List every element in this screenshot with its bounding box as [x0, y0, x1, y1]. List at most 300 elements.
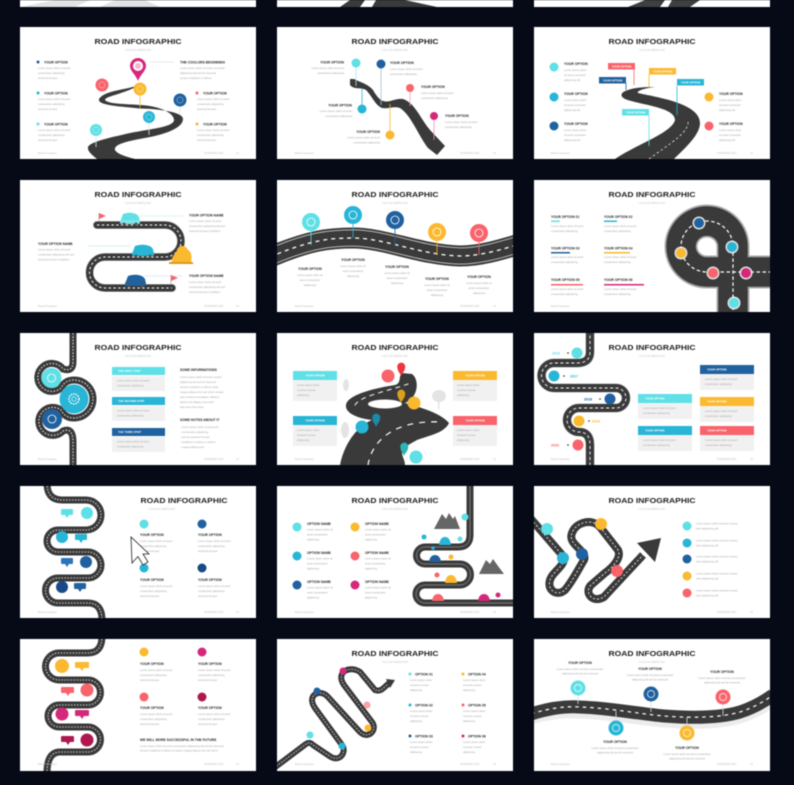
option text: Lorem ipsum dolor sit amet — [312, 66, 344, 70]
option text: eiusmod tempor — [198, 594, 217, 598]
option bars: consectetur adipiscing — [705, 382, 732, 386]
text column: - incididunt ut labore et dolore — [180, 440, 216, 444]
option text: Lorem ipsum dolor sit amet consectetur — [556, 667, 604, 671]
title: ROAD INFOGRAPHIC — [352, 190, 439, 199]
text column: laboris nisi aliquip commodo — [180, 400, 214, 404]
option bars — [112, 367, 165, 452]
footer: ROADMAP 2021 — [204, 304, 224, 308]
footer: Brand Company — [38, 151, 57, 155]
option text: Lorem ipsum dolor sit — [307, 528, 333, 532]
option text: adipiscing — [431, 293, 443, 297]
option text: OPTION NAME — [307, 580, 332, 584]
flag labels: YOUR OPTION — [612, 64, 631, 68]
option text: Lorem ipsum dolor sit amet — [198, 668, 231, 672]
panel: horizontal wave road — [276, 179, 514, 313]
markers — [550, 62, 714, 130]
lane dashes — [355, 384, 440, 465]
option bars: Lorem ipsum dolor sit amet — [117, 440, 150, 444]
option text: YOUR OPTION — [198, 578, 222, 582]
footer: ROADMAP 2021 — [204, 151, 224, 155]
flag labels: YOUR OPTION — [681, 80, 700, 84]
title: ROAD INFOGRAPHIC — [608, 343, 696, 352]
pale trees — [341, 379, 446, 438]
text column: SOME INFORMATIONS — [180, 368, 218, 372]
option bars: consectetur adipiscing — [117, 414, 144, 418]
car: cyan — [120, 213, 140, 226]
option bars: sit amet consec — [457, 433, 476, 437]
footer: ROADMAP 2021 — [717, 151, 737, 155]
text column: adipiscing elit sed do eiusmod — [180, 380, 216, 384]
option text: YOUR OPTION — [356, 130, 381, 134]
option text: OPTION 04 — [468, 672, 486, 676]
footer — [38, 151, 239, 155]
option bars: sit amet consec — [297, 433, 316, 437]
option list: Lorem ipsum dolor sit amet consec — [696, 588, 738, 592]
markers — [356, 363, 422, 464]
title: ROAD INFOGRAPHIC — [94, 343, 182, 352]
subtitle: YOU CAN WRITE ANY — [125, 354, 152, 358]
option text: adipiscing — [365, 596, 377, 600]
option text: eiusmod tempor incididunt — [189, 229, 221, 233]
option text: OPTION 06 — [468, 734, 486, 738]
text column: SOME NOTES ABOUT IT — [180, 418, 220, 422]
footer: ROADMAP 2021 — [717, 457, 737, 461]
footer: 10 — [493, 762, 496, 766]
footer: ROADMAP 2021 — [717, 610, 737, 614]
left options: YOUR OPTION — [44, 122, 68, 126]
footer — [295, 304, 496, 308]
option text: Lorem ipsum dolor sit amet — [551, 255, 584, 259]
right options: tempor incididunt ut labore — [180, 76, 212, 80]
option text: YOUR OPTION — [638, 667, 662, 671]
option bars: Lorem ipsum dolor sit amet — [643, 438, 676, 442]
option text: OPTION 01 — [415, 672, 433, 676]
markers — [674, 216, 752, 310]
option text: Lorem ipsum dolor — [719, 128, 741, 132]
option text: YOUR OPTION — [385, 265, 409, 269]
subtitle: YOU CAN WRITE ANY — [639, 354, 666, 358]
option bars: YOUR OPTION — [645, 428, 665, 432]
text column: magna aliqua enim ad minim veniam — [180, 390, 225, 394]
footer — [295, 610, 496, 614]
footer — [551, 151, 753, 155]
flags — [99, 213, 178, 284]
road — [89, 225, 181, 288]
option bars: YOUR OPTION — [645, 396, 665, 400]
right options: eiusmod tempor — [197, 138, 216, 142]
option text: adipiscing — [347, 274, 359, 278]
right options: THE COOLORS BEGINNING — [180, 60, 225, 64]
option text: amet consectetur — [365, 590, 386, 594]
option text: amet consectetur — [300, 278, 320, 282]
road — [46, 483, 102, 620]
road — [531, 519, 643, 599]
flag labels: YOUR OPTION — [626, 110, 645, 114]
markers — [302, 206, 488, 242]
footer: Brand Company — [295, 610, 314, 614]
option list: tetur adipiscing elit — [696, 594, 719, 598]
option bars: YOUR OPTION — [707, 428, 727, 432]
panel: large perspective road — [276, 332, 514, 466]
option text: Lorem ipsum dolor sit — [424, 283, 450, 287]
option text: sit amet consectet — [564, 103, 586, 107]
footer: ROADMAP 2021 — [460, 151, 480, 155]
option text — [307, 522, 391, 600]
option text: YOUR OPTION — [140, 578, 164, 582]
markers — [570, 680, 730, 740]
year labels: 2016 — [552, 352, 560, 356]
icon: yellow tree — [169, 246, 193, 264]
option text: Lorem ipsum dolor sit — [365, 556, 391, 560]
subtitle: YOU CAN WRITE ANY — [149, 507, 176, 511]
option text: YOUR OPTION — [421, 85, 445, 89]
left options: eiusmod tempor — [38, 138, 57, 142]
option text: consectetur adipiscing — [551, 292, 578, 296]
panel: circular road bends — [19, 332, 257, 466]
panel: gentle wave road — [533, 638, 771, 772]
footer: Brand Company — [38, 762, 57, 766]
road — [350, 79, 445, 155]
option text: eiusmod tempor — [140, 678, 159, 682]
option bars: consectetur adipiscing — [117, 444, 144, 448]
option text: amet consectetur — [307, 532, 328, 536]
option text: adipiscing elit sed do eiusmod — [704, 680, 740, 684]
option text: YOUR OPTION NAME — [38, 242, 73, 246]
text column: duis aute irure dolor — [180, 405, 204, 409]
markers — [352, 58, 438, 140]
pins — [422, 514, 500, 598]
title: ROAD INFOGRAPHIC — [352, 496, 439, 505]
option text: adipiscing — [463, 719, 475, 723]
option text: eiusmod tempor — [140, 549, 159, 553]
footer: ROADMAP 2021 — [717, 762, 737, 766]
option text: consectetur adipiscing elit sed — [189, 285, 225, 289]
option text: adipiscing — [410, 750, 422, 754]
year markers — [548, 348, 616, 450]
closing statement — [140, 738, 224, 752]
footer: Brand Company — [38, 304, 57, 308]
option text: adipiscing — [307, 596, 319, 600]
left options: YOUR OPTION — [44, 60, 68, 64]
right options: consectetur adipiscing — [197, 133, 224, 137]
option text: Lorem ipsum dolor sit amet — [604, 287, 637, 291]
option bars: sit amet consec — [297, 388, 316, 392]
option text: adipiscing — [410, 688, 422, 692]
option text: Lorem ipsum dolor sit — [307, 586, 333, 590]
text column: - sed do eiusmod tempor — [180, 435, 210, 439]
option text: YOUR OPTION — [568, 661, 592, 665]
option bars: YOUR OPTION — [465, 374, 485, 378]
title: ROAD INFOGRAPHIC — [94, 190, 182, 199]
option text: adipiscing — [410, 719, 422, 723]
footer: ROADMAP 2021 — [204, 610, 224, 614]
option text: Lorem ipsum dolor — [463, 678, 485, 682]
option text: OPTION NAME — [365, 580, 390, 584]
option text: Lorem ipsum dolor sit amet — [348, 136, 380, 140]
title: ROAD INFOGRAPHIC — [352, 37, 439, 46]
option text: Lorem ipsum dolor sit — [365, 528, 391, 532]
footer: Brand Company — [295, 457, 314, 461]
panel: vertical snake road warm — [19, 638, 257, 772]
footer: 10 — [493, 151, 496, 155]
option text: sit amet consec — [410, 745, 429, 749]
option text: Lorem ipsum dolor sit amet — [421, 91, 454, 95]
option text: consectetur adipiscing — [604, 260, 631, 264]
option bars: adipiscing — [297, 438, 309, 442]
option text: consectetur adipiscing elit sed — [38, 252, 74, 256]
option text: YOUR OPTION 04 — [604, 246, 633, 250]
option bars: Lorem ipsum dolor sit amet — [705, 438, 738, 442]
footer: 10 — [236, 457, 239, 461]
road loop — [681, 221, 772, 314]
option bars: adipiscing — [457, 438, 469, 442]
option text: adipiscing elit sed do eiusmod — [597, 750, 633, 754]
option bars: YOUR OPTION — [707, 400, 727, 404]
footer: Brand Company — [38, 610, 57, 614]
option bars: consectetur adipiscing — [705, 414, 732, 418]
year labels: 2017 — [570, 374, 578, 378]
option list: tetur adipiscing elit — [696, 576, 719, 580]
option text — [140, 662, 231, 726]
option bars: adipiscing — [297, 393, 309, 397]
option bars — [293, 371, 497, 446]
option text: adipiscing — [365, 566, 377, 570]
option text: eiusmod tempor incididunt — [189, 290, 221, 294]
option text: Lorem ipsum dolor sit — [365, 586, 391, 590]
option text: eiusmod tempor — [140, 722, 159, 726]
right options — [180, 60, 230, 142]
footer — [295, 457, 496, 461]
option text: consectetur adipiscing — [604, 292, 631, 296]
option bars: THE FIRST STEP — [118, 369, 141, 373]
panel: timeline road — [533, 332, 771, 466]
option text: adipiscing — [304, 283, 316, 287]
option text: adipiscing elit — [719, 138, 735, 142]
option text: YOUR OPTION — [140, 662, 164, 666]
footer: Brand Company — [551, 610, 570, 614]
option bars: Lorem ipsum dolor — [457, 383, 479, 387]
panel: zigzag road with arrow — [276, 638, 514, 772]
panel: ribbon road — [276, 26, 514, 160]
title: ROAD INFOGRAPHIC — [352, 343, 439, 352]
option text: YOUR OPTION — [564, 62, 588, 66]
footer — [551, 762, 753, 766]
option text — [38, 214, 225, 294]
footer: ROADMAP 2021 — [204, 457, 224, 461]
option text: YOUR OPTION — [328, 104, 353, 108]
option text — [297, 258, 492, 297]
panel: cropped top row right — [533, 0, 771, 8]
option text — [312, 60, 478, 144]
road — [340, 373, 449, 465]
left options: Lorem ipsum dolor sit amet — [38, 66, 71, 70]
option text: sit amet consec — [410, 714, 429, 718]
car: blue — [132, 245, 154, 258]
icon circles — [42, 368, 88, 429]
arrow head — [637, 538, 661, 562]
panel: cropped top row middle — [276, 0, 514, 8]
option text: OPTION NAME — [365, 551, 390, 555]
footer — [295, 762, 496, 766]
option text: Lorem ipsum dolor — [410, 709, 432, 713]
right options: adipiscing elit sed do eiusmod — [180, 71, 216, 75]
footer: Brand Company — [551, 304, 570, 308]
option text: Lorem ipsum dolor sit amet — [140, 712, 173, 716]
option text: Lorem ipsum dolor sit amet — [445, 120, 478, 124]
option text: OPTION NAME — [365, 522, 390, 526]
option text: Lorem ipsum dolor sit amet — [140, 539, 173, 543]
option text: YOUR OPTION 01 — [551, 215, 580, 219]
option text: Lorem ipsum dolor sit amet — [189, 280, 222, 284]
option text: Lorem ipsum dolor sit amet — [198, 584, 231, 588]
option text: consectetur adipiscing — [140, 589, 167, 593]
flag labels: YOUR OPTION — [603, 78, 622, 82]
option text: YOUR OPTION NAME — [189, 274, 224, 278]
footer — [38, 610, 239, 614]
option text: Lorem ipsum dolor sit amet — [38, 248, 71, 252]
option text: YOUR OPTION — [140, 533, 164, 537]
option text: consectetur adipiscing elit sed — [189, 224, 225, 228]
option text: Lorem ipsum dolor sit — [466, 281, 492, 285]
left options: eiusmod tempor — [38, 107, 57, 111]
subtitle: YOU CAN WRITE ANY — [639, 507, 666, 511]
option bars: Lorem ipsum dolor sit amet — [705, 409, 738, 413]
option bullets — [140, 520, 206, 572]
panel: vertical snake road blue — [19, 485, 257, 619]
connectors — [96, 62, 180, 147]
connectors — [356, 67, 434, 140]
markers — [541, 518, 623, 577]
option text: YOUR OPTION 03 — [551, 246, 580, 250]
option text: amet consectetur — [387, 276, 407, 280]
option text: Lorem ipsum dolor — [463, 740, 485, 744]
text column: tempor incididunt ut labore dolor — [180, 385, 218, 389]
option bars: Lorem ipsum dolor sit amet — [117, 408, 150, 412]
option text: OPTION 05 — [468, 704, 486, 708]
option text: Lorem ipsum dolor — [410, 678, 432, 682]
option text: adipiscing elit sed do eiusmod — [632, 678, 668, 682]
subtitle: YOU CAN WRITE ANY — [125, 201, 152, 205]
option text: amet consectetur — [307, 590, 328, 594]
option text: YOUR OPTION — [564, 122, 588, 126]
left options: Lorem ipsum dolor sit amet — [38, 97, 71, 101]
option text: consectetur adipiscing — [551, 229, 578, 233]
dotted leaders — [88, 216, 183, 276]
option text: sit amet consectet — [719, 103, 741, 107]
right options: YOUR OPTION — [203, 92, 227, 96]
option text: adipiscing elit — [719, 108, 735, 112]
subtitle: YOU CAN WRITE ANY — [382, 201, 409, 205]
option bars: Lorem ipsum dolor — [297, 383, 319, 387]
right options: consectetur adipiscing — [197, 102, 224, 106]
option bars: consectetur adipiscing — [643, 443, 670, 447]
markers and tags — [55, 659, 94, 746]
left options: consectetur adipiscing — [38, 71, 65, 75]
option text: Lorem ipsum dolor sit amet — [551, 287, 584, 291]
option text: Lorem ipsum dolor sit amet — [604, 224, 637, 228]
option text: amet consectetur — [469, 286, 489, 290]
option text: sit amet consec — [463, 714, 482, 718]
footer: ROADMAP 2021 — [204, 762, 224, 766]
markers and tags — [56, 507, 93, 593]
option text: YOUR OPTION — [198, 533, 222, 537]
footer: Brand Company — [551, 762, 570, 766]
left options: consectetur adipiscing — [38, 133, 65, 137]
markers — [292, 522, 360, 590]
option text: consectetur adipiscing — [140, 717, 167, 721]
panel: road with cars — [19, 179, 257, 313]
option text: eiusmod tempor — [140, 594, 159, 598]
footer: 10 — [493, 610, 496, 614]
right options: eiusmod tempor — [197, 107, 216, 111]
option list: tetur adipiscing elit — [696, 526, 719, 530]
option text: Lorem ipsum dolor — [564, 128, 586, 132]
option text: Lorem ipsum dolor — [564, 68, 586, 72]
icon: mouse cursor — [131, 537, 149, 565]
flag labels: YOUR OPTION — [653, 70, 672, 74]
option text: consectetur adipiscing — [325, 114, 353, 118]
option text: Lorem ipsum dolor — [463, 709, 485, 713]
option text: Lorem ipsum dolor sit amet consectetur — [698, 676, 746, 680]
option text: consectetur adipiscing — [353, 140, 381, 144]
option text: amet consectetur — [365, 532, 386, 536]
text column: - consectetur adipiscing — [180, 430, 209, 434]
option text: YOUR OPTION — [341, 258, 365, 262]
option text: YOUR OPTION — [425, 277, 449, 281]
connectors — [626, 69, 677, 146]
flag labels — [599, 63, 704, 116]
option text: Lorem ipsum dolor sit — [297, 273, 323, 277]
text column: - magna aliqua enim — [180, 445, 205, 449]
option text: Lorem ipsum dolor sit amet — [140, 668, 173, 672]
option text: eiusmod tempor — [198, 722, 217, 726]
road shadow — [531, 700, 773, 722]
option text: amet consectetur — [427, 288, 447, 292]
footer: 10 — [750, 457, 753, 461]
subtitle: YOU CAN WRITE ANY — [382, 48, 409, 52]
option text: YOUR OPTION NAME — [189, 214, 224, 218]
panel: road with cars and mountains — [276, 485, 514, 619]
road — [88, 85, 183, 159]
right options: YOUR OPTION — [203, 122, 227, 126]
footer: 10 — [236, 610, 239, 614]
right options: Lorem ipsum dolor sit amet — [197, 128, 230, 132]
option bars: Lorem ipsum dolor sit amet — [117, 378, 150, 382]
option text: adipiscing — [307, 566, 319, 570]
option text: sit amet consectet — [564, 133, 586, 137]
option text: YOUR OPTION — [198, 662, 222, 666]
option bars: Lorem ipsum dolor — [297, 428, 319, 432]
option text: Lorem ipsum dolor sit — [340, 264, 366, 268]
option text: YOUR OPTION — [603, 740, 627, 744]
panel: road loop — [533, 179, 771, 313]
option list: Lorem ipsum dolor sit amet consec — [696, 538, 738, 542]
footer: ROADMAP 2021 — [460, 762, 480, 766]
subtitle: YOU CAN WRITE ANY — [125, 48, 152, 52]
option bars: adipiscing — [457, 393, 469, 397]
text column: - Lorem ipsum dolor sit amet elit — [180, 425, 218, 429]
option text: OPTION 03 — [415, 734, 433, 738]
road — [38, 330, 93, 467]
option text: YOUR OPTION — [719, 92, 743, 96]
footer: Brand Company — [295, 151, 314, 155]
option text: consectetur adipiscing — [421, 96, 448, 100]
right options: Lorem ipsum dolor sit amet — [197, 97, 230, 101]
option text: OPTION NAME — [307, 522, 332, 526]
car: dark blue — [125, 275, 146, 288]
option text: consectetur adipiscing — [198, 589, 225, 593]
option text: consectetur adipiscing — [140, 544, 167, 548]
